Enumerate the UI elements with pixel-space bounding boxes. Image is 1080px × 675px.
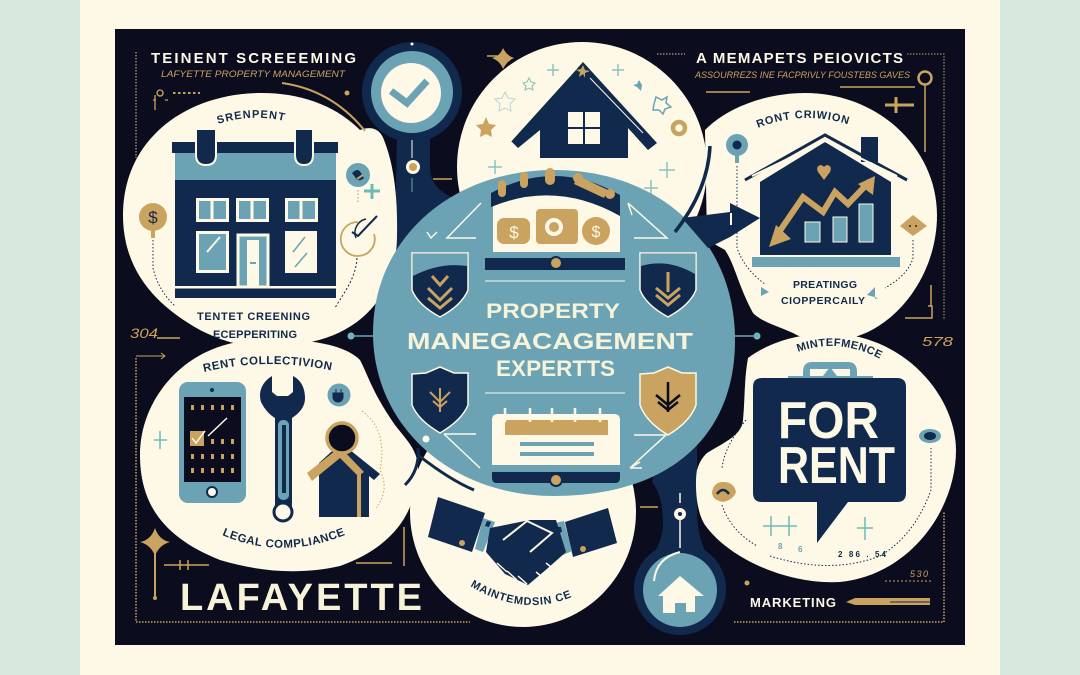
- gold corner numbers: 304: [130, 325, 158, 341]
- teal nodes: [348, 332, 760, 340]
- icon: house: [511, 62, 657, 158]
- dotted outline: [722, 420, 931, 566]
- heading: tenant screening: TEINENT SCREEEMING: [151, 50, 356, 67]
- icon: gold badge: [712, 482, 736, 502]
- panel: lower right for rent circle: [696, 336, 956, 582]
- icon: gold pen: [846, 598, 930, 605]
- panel: bottom centre handshake circle: [410, 451, 636, 627]
- icon: check clock: [341, 216, 377, 256]
- shield: top left: [412, 253, 468, 317]
- icon: house with chart: [745, 135, 907, 267]
- gold corner numbers: [130, 325, 954, 579]
- text: rent: RENT: [778, 437, 895, 495]
- icon: teal markers: [761, 287, 878, 299]
- label: srenpent: SRENPENT: [217, 110, 286, 124]
- connector: bottom stem: [650, 440, 710, 560]
- dotted arc: [335, 258, 357, 308]
- icon: handshake: [428, 497, 617, 585]
- bar with gold knob: [485, 257, 625, 270]
- heading: marketing: MARKETING: [750, 595, 836, 610]
- label: cioppercaily: CIOPPERCAILY: [781, 295, 865, 307]
- dark panel: [115, 29, 965, 645]
- icon: building: [172, 129, 338, 298]
- icons: stars and sparks: [476, 64, 685, 196]
- heading: expertts: EXPERTTS: [496, 356, 615, 381]
- icon: phone: [179, 382, 246, 503]
- icon: teal plus: [364, 184, 380, 199]
- small numbers: [778, 542, 887, 559]
- heading: a memapets peiovicts: [694, 50, 910, 80]
- line: [485, 280, 625, 282]
- icon: for rent bubble: [753, 362, 906, 543]
- label: mintefmence: MINTEFMENCE: [796, 338, 883, 358]
- label: rent collection: RENT COLLECTIVION: [203, 356, 332, 372]
- heading: manegacagement: MANEGACAGEMENT: [407, 328, 693, 354]
- arrow: to rent panel: [675, 146, 760, 248]
- dotted arc: [362, 411, 384, 508]
- panel: top right chart circle: [705, 93, 937, 336]
- gold corner numbers: 530: [910, 569, 928, 579]
- icon: teal flower pin: [726, 134, 748, 163]
- label: tentet creening: TENTET CREENING: [197, 311, 310, 323]
- gold sparkle lower left: [140, 528, 170, 600]
- teal plus signs: [763, 516, 873, 540]
- panel: top left building circle: [123, 93, 398, 343]
- heading: a memapets peiovicts: ASSOURREZS INE FACPRIVLY FOUSTEBS GAVES: [694, 70, 910, 80]
- banner with coins: $: [592, 224, 601, 241]
- small numbers: 2 86 . 54: [838, 550, 887, 559]
- gold marker: [744, 580, 750, 586]
- label: maintemdsin ce: MAINTEMDSIN CE: [470, 580, 572, 606]
- shield: top right: [640, 253, 696, 317]
- banner with coins: [491, 168, 620, 252]
- icon: gold diamond: [900, 215, 927, 236]
- arc: lower connector: [405, 448, 474, 490]
- gold corner numbers: 578: [922, 334, 954, 349]
- icon: teal pin: [919, 429, 941, 443]
- icon: calendar: [492, 408, 620, 486]
- keyhole: top checkmark: [362, 42, 462, 192]
- small numbers: 6: [798, 545, 803, 554]
- shield: lower right: [640, 367, 696, 435]
- panel: lower left tools circle: [140, 342, 418, 572]
- small numbers: 8: [778, 542, 783, 551]
- shield: lower left: [412, 367, 468, 433]
- icon: dollar pin: [139, 203, 175, 306]
- label: legal compliance: LEGAL COMPLIANCE: [222, 528, 345, 548]
- heading: tenant screening: [151, 50, 356, 79]
- panel: top connector stem: [395, 130, 463, 260]
- icon: teal badge small: [328, 384, 350, 406]
- decorative frame: dotted and gold lines: [136, 52, 944, 622]
- dotted loop: [737, 166, 913, 288]
- keyhole: bottom house: [634, 493, 726, 635]
- line: [485, 392, 625, 394]
- icon: teal sparkle: [154, 431, 167, 449]
- heading: lafayette: LAFAYETTE: [180, 577, 422, 619]
- icon: teal badge: [346, 163, 370, 203]
- gold swoosh: [282, 83, 365, 131]
- icon: house key: [307, 423, 380, 517]
- icon: dollar pin: $: [148, 208, 158, 227]
- panel: top centre house circle: [457, 42, 707, 292]
- label: preatingg: PREATINGG: [793, 279, 857, 291]
- heading: property: PROPERTY: [486, 300, 620, 323]
- text: for: FOR: [778, 392, 879, 450]
- flow arrows: cream: [427, 203, 667, 468]
- gold sparkle top: [492, 48, 514, 69]
- label: ecepperiting: ECEPPERITING: [213, 329, 297, 341]
- banner with coins: $: [509, 223, 519, 242]
- heading: a memapets peiovicts: A MEMAPETS PEIOVICTS: [696, 50, 903, 67]
- heading: tenant screening: LAFYETTE PROPERTY MANAGEMENT: [161, 69, 347, 79]
- panel: central circle: [373, 168, 735, 496]
- label: ront criwion: RONT CRIWION: [756, 110, 850, 128]
- icon: wrench: [260, 376, 305, 521]
